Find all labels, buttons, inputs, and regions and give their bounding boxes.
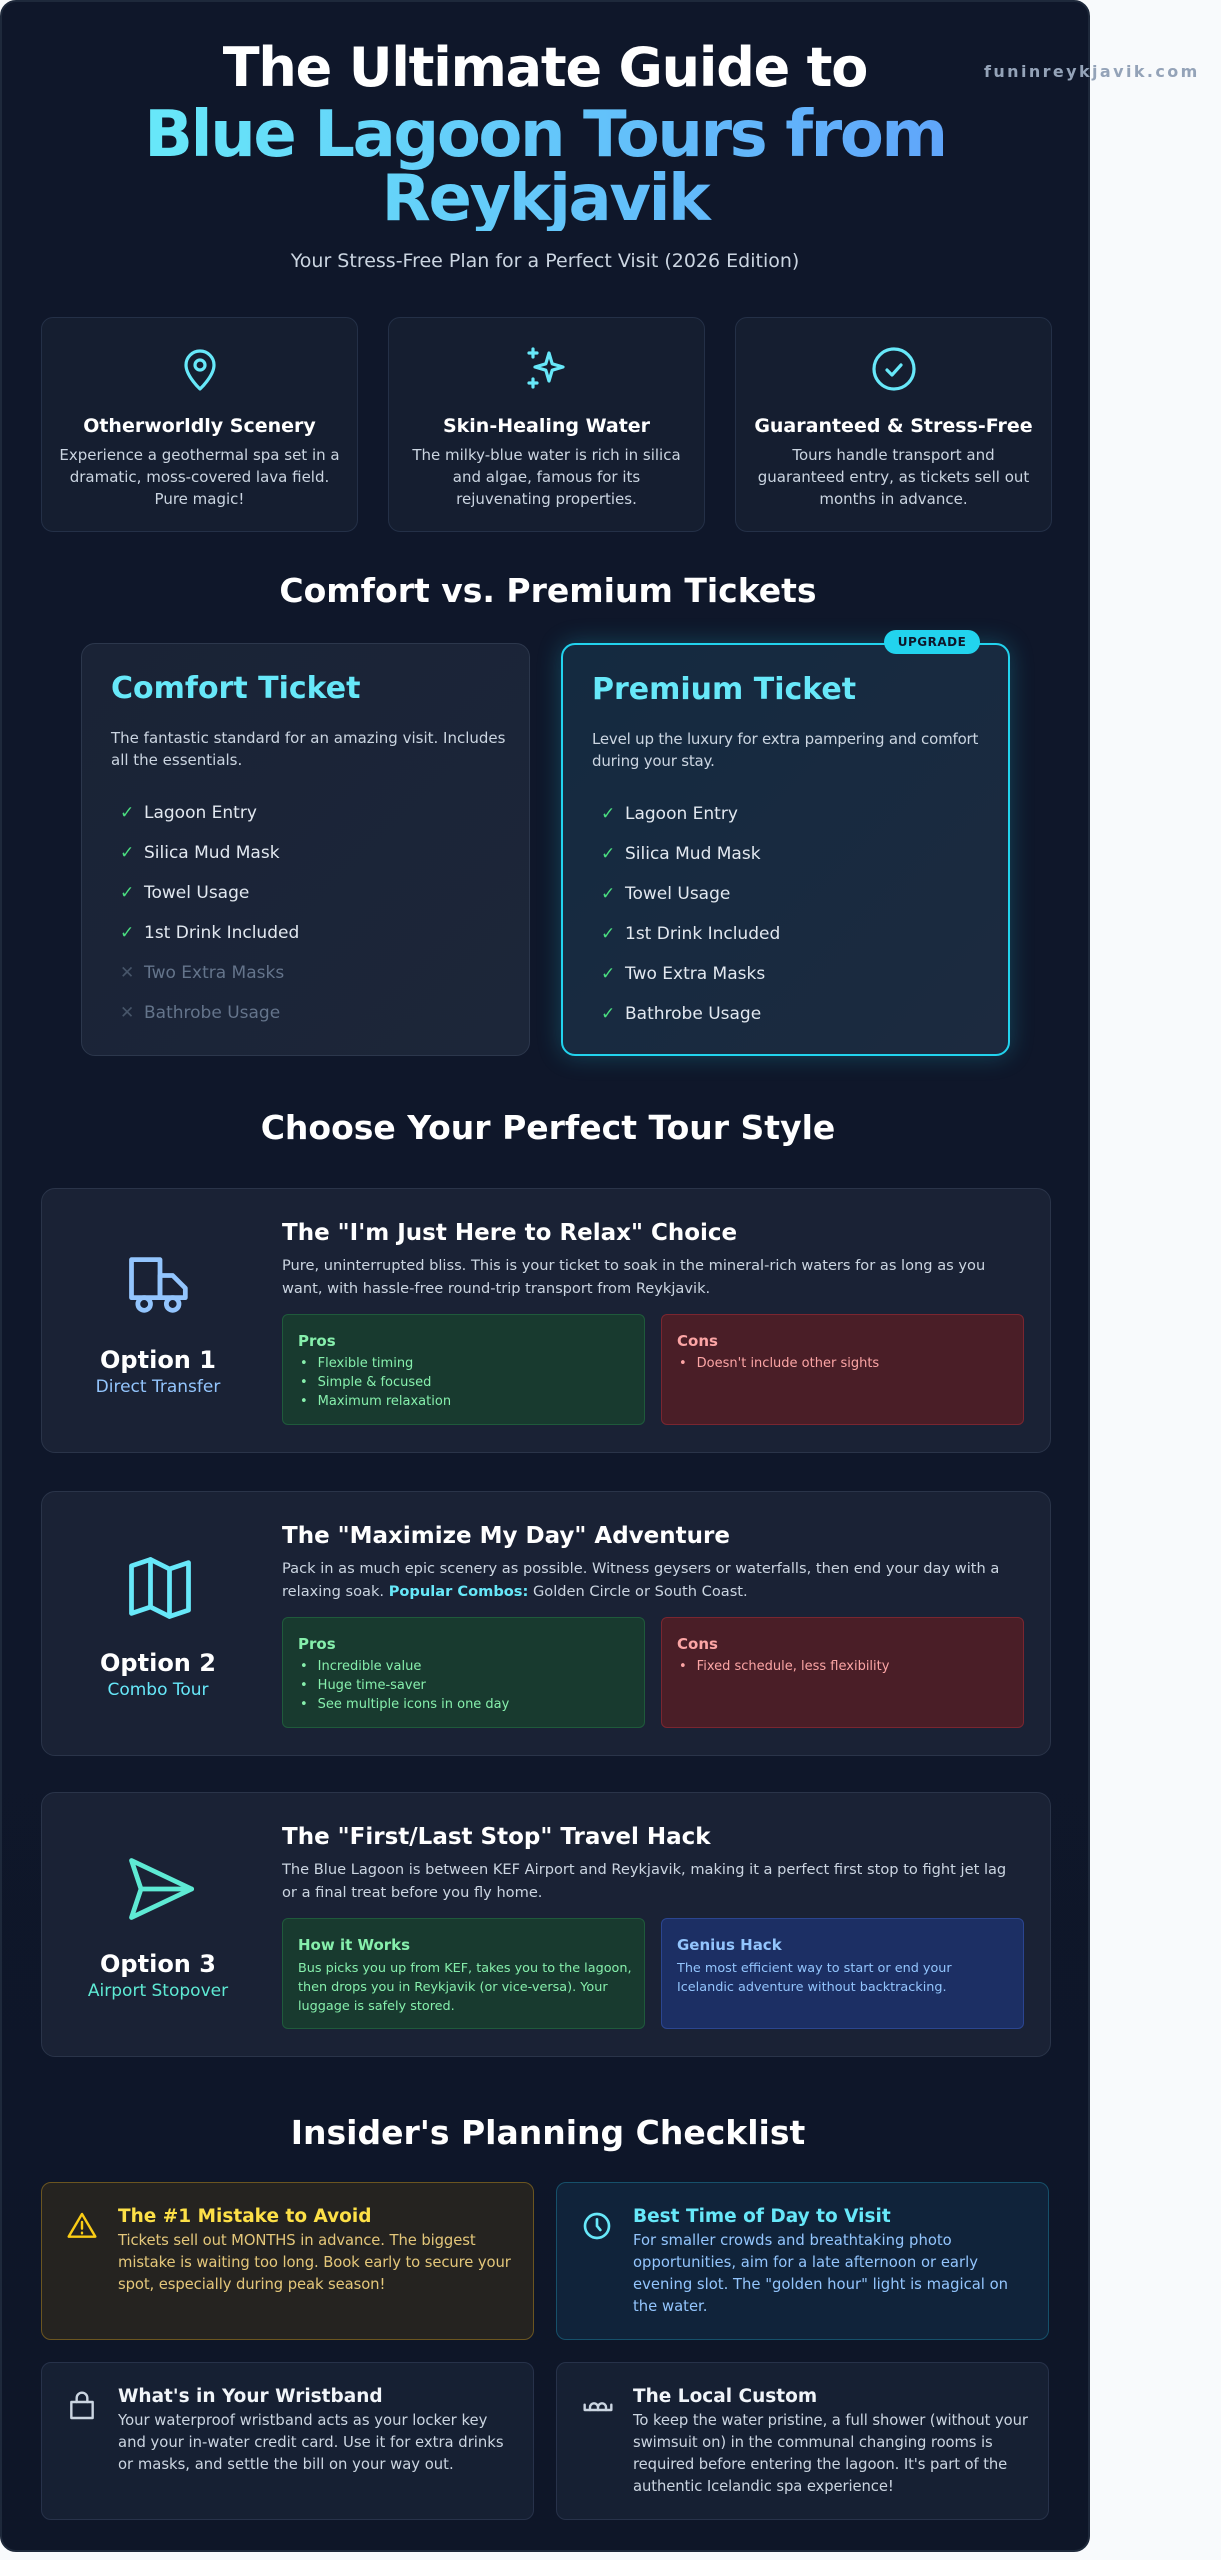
premium ticket: ✓: [601, 844, 615, 864]
comfort ticket: Towel Usage: [144, 883, 249, 903]
premium ticket: Lagoon Entry: [625, 804, 738, 824]
premium ticket: Bathrobe Usage: [625, 1004, 761, 1024]
feature card: guaranteed: Tours handle transport and guaranteed entry, as tickets sell out months in advance.: [758, 446, 1029, 508]
genius hack: The most efficient way to start or end your Icelandic adventure without backtracking.: [677, 1961, 952, 1995]
comfort ticket: ✓: [120, 883, 134, 903]
option 3 card: Airport Stopover: [88, 1981, 228, 2001]
option 1 card: The "I'm Just Here to Relax" Choice: [282, 1220, 737, 1246]
option 2 card: Combo Tour: [107, 1680, 209, 1700]
premium ticket: Premium Ticket: [592, 672, 856, 707]
pros: Maximum relaxation: [318, 1394, 451, 1409]
checklist: local custom: [556, 2362, 1049, 2520]
premium ticket: 1st Drink Included: [625, 924, 780, 944]
pros: See multiple icons in one day: [318, 1697, 509, 1712]
option 3 card: The Blue Lagoon is between KEF Airport and Reykjavik, making it a perfect first stop to fight jet lag: [282, 1861, 1006, 1878]
feature card: guaranteed: [735, 317, 1052, 532]
cons: Cons: [677, 1332, 718, 1350]
option 1 card: Option 1: [100, 1346, 216, 1374]
comfort ticket: 1st Drink Included: [144, 923, 299, 943]
icon: shower loop: [583, 2402, 613, 2412]
title: The Ultimate Guide to: [223, 36, 867, 99]
icon: map pin: [184, 349, 216, 391]
cons: Cons: [677, 1635, 718, 1653]
feature card: scenery: Experience a geothermal spa set in a dramatic, moss-covered lava field. Pure magic!: [59, 446, 340, 508]
checklist: local custom: authentic Icelandic spa experience!: [633, 2478, 894, 2495]
checklist: mistake: Tickets sell out MONTHS in advance. The biggest: [118, 2232, 476, 2249]
cons: Doesn't include other sights: [697, 1356, 879, 1371]
checklist: best time: [556, 2182, 1049, 2340]
comfort ticket: ✕: [120, 1003, 134, 1023]
pros: Simple & focused: [318, 1375, 431, 1390]
feature card: water: The milky-blue water is rich in silica and algae, famous for its rejuvenating properties.: [412, 446, 681, 508]
pros: Huge time-saver: [318, 1678, 426, 1693]
pros: [282, 1617, 645, 1728]
heading: tickets: Comfort vs. Premium Tickets: [279, 571, 817, 610]
icon: truck: [129, 1257, 188, 1313]
heading: tour style: Choose Your Perfect Tour Style: [261, 1108, 835, 1147]
option 3 card: [41, 1792, 1051, 2057]
option 2 card: [41, 1491, 1051, 1756]
cons: Fixed schedule, less flexibility: [697, 1659, 889, 1674]
how it works: Bus picks you up from KEF, takes you to the lagoon, then drops you in Reykjavik (or vice-versa). Your luggage is safely stored.: [298, 1961, 632, 2014]
comfort ticket: Lagoon Entry: [144, 803, 257, 823]
comfort ticket: The fantastic standard for an amazing visit. Includes all the essentials.: [111, 729, 505, 769]
comfort ticket: ✕: [120, 963, 134, 983]
genius hack: [661, 1918, 1024, 2029]
option 2 card: Option 2: [100, 1649, 216, 1677]
icon: sparkles: [527, 347, 565, 389]
pros: Flexible timing: [318, 1356, 413, 1371]
premium ticket: ✓: [601, 804, 615, 824]
upgrade badge: UPGRADE: [898, 635, 966, 649]
option 2 card: The "Maximize My Day" Adventure: [282, 1523, 730, 1549]
premium ticket: ✓: [601, 964, 615, 984]
checklist: best time: opportunities, aim for a late afternoon or early: [633, 2254, 978, 2271]
comfort ticket: [81, 643, 530, 1056]
checklist: local custom: To keep the water pristine, a full shower (without your: [633, 2412, 1028, 2429]
checklist: wristband: What's in Your Wristband: [118, 2386, 383, 2407]
checklist: best time: the water.: [633, 2298, 708, 2315]
premium ticket: ✓: [601, 1004, 615, 1024]
premium ticket: Two Extra Masks: [625, 964, 765, 984]
option 1 card: Direct Transfer: [96, 1377, 220, 1397]
premium ticket: Level up the luxury for extra pampering and comfort during your stay.: [592, 730, 978, 770]
title: Reykjavik: [382, 162, 708, 236]
heading: checklist: Insider's Planning Checklist: [291, 2113, 805, 2152]
icon: warning: [67, 2212, 96, 2238]
icon: send: [129, 1858, 194, 1920]
checklist: local custom: swimsuit on) in the communal changing rooms is: [633, 2434, 993, 2451]
premium ticket: ✓: [601, 884, 615, 904]
premium ticket: Towel Usage: [625, 884, 730, 904]
checklist: best time: For smaller crowds and breathtaking photo: [633, 2232, 952, 2249]
checklist: mistake: mistake is waiting too long. Book early to secure your: [118, 2254, 511, 2271]
premium ticket: [561, 643, 1010, 1056]
pros: Incredible value: [318, 1659, 421, 1674]
checklist: mistake: The #1 Mistake to Avoid: [118, 2206, 371, 2227]
subtitle: Your Stress-Free Plan for a Perfect Visit (2026 Edition): [291, 250, 799, 272]
checklist: wristband: or masks, and settle the bill on your way out.: [118, 2456, 454, 2473]
option 2 card: Pack in as much epic scenery as possible. Witness geysers or waterfalls, then end your day with a relaxing soak. Popular Combos: Golden Circle or South Coast.: [282, 1560, 999, 1600]
how it works: How it Works: [298, 1936, 410, 1954]
option 3 card: The "First/Last Stop" Travel Hack: [282, 1824, 711, 1850]
feature card: scenery: [41, 317, 358, 532]
checklist: mistake: [41, 2182, 534, 2340]
icon: clock: [584, 2212, 610, 2240]
watermark: funinreykjavik.com: [984, 62, 1200, 81]
comfort ticket: ✓: [120, 803, 134, 823]
premium ticket: Silica Mud Mask: [625, 844, 761, 864]
option 3 card: or a final treat before you fly home.: [282, 1884, 542, 1901]
comfort ticket: ✓: [120, 923, 134, 943]
checklist: wristband: and your in-water credit card. Use it for extra drinks: [118, 2434, 504, 2451]
option 1 card: Pure, uninterrupted bliss. This is your ticket to soak in the mineral-rich waters for as long as you want, with hassle-free round-trip transport from Reykjavik.: [282, 1257, 985, 1297]
feature card: guaranteed: Guaranteed & Stress-Free: [754, 415, 1033, 437]
how it works: [282, 1918, 645, 2029]
checklist: best time: Best Time of Day to Visit: [633, 2206, 891, 2227]
option 1 card: [41, 1188, 1051, 1453]
checklist: mistake: spot, especially during peak season!: [118, 2276, 385, 2293]
feature card: water: Skin-Healing Water: [443, 415, 650, 437]
icon: check circle: [872, 347, 916, 391]
option 3 card: Option 3: [100, 1950, 216, 1978]
checklist: local custom: required before entering the lagoon. It's part of the: [633, 2456, 1007, 2473]
pros: [282, 1314, 645, 1425]
genius hack: Genius Hack: [677, 1936, 782, 1954]
icon: lock bag: [70, 2392, 94, 2420]
premium ticket: ✓: [601, 924, 615, 944]
comfort ticket: Comfort Ticket: [111, 671, 360, 706]
comfort ticket: Bathrobe Usage: [144, 1003, 280, 1023]
comfort ticket: Silica Mud Mask: [144, 843, 280, 863]
pros: Pros: [298, 1332, 336, 1350]
cons: [661, 1617, 1024, 1728]
icon: map: [129, 1557, 191, 1619]
title: Blue Lagoon Tours from: [144, 98, 946, 172]
title: [144, 36, 946, 236]
feature card: water: [388, 317, 705, 532]
checklist: wristband: [41, 2362, 534, 2520]
comfort ticket: Two Extra Masks: [144, 963, 284, 983]
checklist: best time: evening slot. The "golden hour" light is magical on: [633, 2276, 1008, 2293]
checklist: local custom: The Local Custom: [633, 2386, 817, 2407]
checklist: wristband: Your waterproof wristband acts as your locker key: [118, 2412, 487, 2429]
feature card: scenery: Otherworldly Scenery: [83, 415, 316, 437]
cons: [661, 1314, 1024, 1425]
comfort ticket: ✓: [120, 843, 134, 863]
upgrade badge: [884, 630, 980, 654]
pros: Pros: [298, 1635, 336, 1653]
